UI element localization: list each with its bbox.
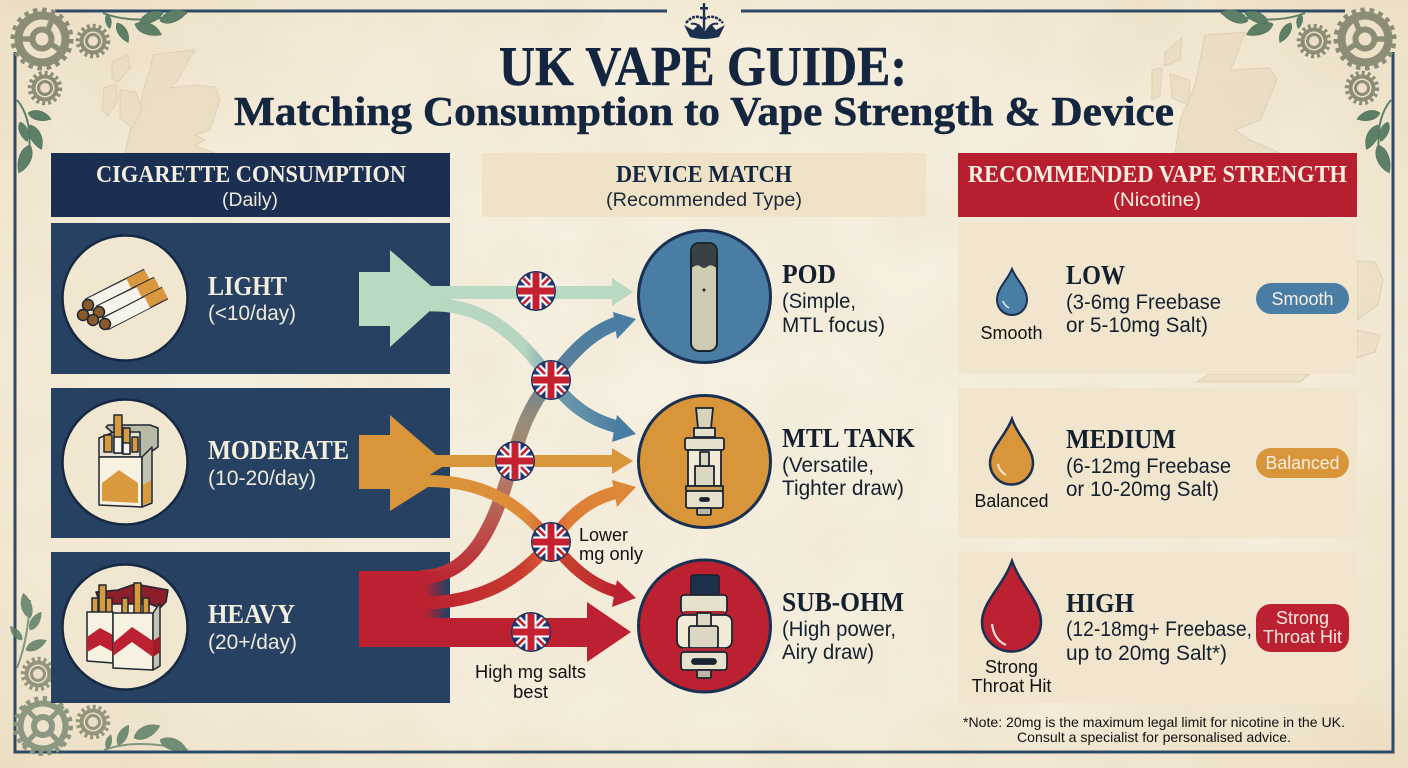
strength: medium: (6-12mg Freebase xyxy=(1066,455,1231,478)
strength: low: (3-6mg Freebase xyxy=(1066,291,1221,314)
background map: Scotland left xyxy=(102,50,220,153)
label: mtl tank: Tighter draw) xyxy=(782,477,904,500)
header: device match: DEVICE MATCH xyxy=(616,162,792,188)
gears bottom left xyxy=(16,659,108,753)
panel: low strength xyxy=(958,222,1357,374)
label: moderate xyxy=(208,435,349,490)
gears top right xyxy=(1299,10,1394,103)
label: strong throat hit: Throat Hit xyxy=(972,676,1052,696)
header: cigarette consumption xyxy=(51,153,450,217)
label: moderate: MODERATE xyxy=(208,435,349,465)
badge: strong throat hit: Strong xyxy=(1276,608,1329,628)
flag: moderate to mtl tank xyxy=(495,441,535,481)
header: cigarette consumption: (Daily) xyxy=(222,190,278,211)
badge: balanced: Balanced xyxy=(1266,453,1340,473)
device: mtl tank xyxy=(638,396,915,528)
strength: medium: MEDIUM xyxy=(1066,424,1176,454)
header: device match xyxy=(482,153,926,217)
panel: heavy smokers xyxy=(51,552,450,703)
strength: low: LOW xyxy=(1066,260,1125,290)
panel: high strength xyxy=(958,552,1357,703)
footnote: Consult a specialist for personalised advice. xyxy=(1017,729,1291,745)
background map: Scotland right xyxy=(1152,32,1280,153)
note: lower mg only xyxy=(579,525,643,564)
strength: high: up to 20mg Salt*) xyxy=(1066,642,1227,665)
label: pod: POD xyxy=(782,259,836,289)
icon: loose cigarettes xyxy=(78,275,165,330)
leaves bottom left xyxy=(7,592,189,755)
arrow: light to pod xyxy=(359,250,633,347)
header: recommended vape strength: (Nicotine) xyxy=(1113,190,1201,211)
label: balanced: Balanced xyxy=(974,491,1048,511)
header: recommended vape strength: RECOMMENDED VAPE STRENGTH xyxy=(968,162,1347,188)
badge: strong throat hit: Throat Hit xyxy=(1263,627,1342,647)
strength: low xyxy=(1066,260,1221,337)
icon: red drop xyxy=(982,561,1041,652)
background map: England fragment right xyxy=(1197,261,1383,382)
label: light xyxy=(208,271,296,325)
note: high mg salts best: best xyxy=(513,682,548,702)
label: moderate: (10-20/day) xyxy=(208,467,316,490)
icon: orange drop xyxy=(990,419,1033,484)
label: mtl tank: MTL TANK xyxy=(782,423,915,453)
badge: smooth xyxy=(1256,283,1349,314)
label: strong throat hit: Strong xyxy=(985,657,1038,677)
flag: upper crossing xyxy=(531,360,571,400)
label: smooth: Smooth xyxy=(980,323,1042,343)
arrow: moderate to mtl tank xyxy=(359,415,633,511)
label: sub-ohm: Airy draw) xyxy=(782,641,874,664)
icon: open cigarette pack xyxy=(99,415,158,507)
header: recommended vape strength xyxy=(958,153,1357,217)
leaves top right xyxy=(1219,6,1394,175)
arrow: moderate to sub-ohm xyxy=(425,481,636,607)
panel: moderate smokers xyxy=(51,388,450,538)
title: UK VAPE GUIDE: xyxy=(499,36,907,98)
strength: medium: or 10-20mg Salt) xyxy=(1066,478,1219,501)
header: cigarette consumption: CIGARETTE CONSUMPTION xyxy=(96,162,407,188)
label: heavy xyxy=(208,599,297,654)
label: strong throat hit xyxy=(972,657,1052,696)
device: sub-ohm xyxy=(638,560,904,692)
arrow: heavy to pod via crossing xyxy=(420,312,636,577)
note: lower mg only: Lower xyxy=(579,525,628,545)
strength: high: HIGH xyxy=(1066,588,1134,618)
note: high mg salts best: High mg salts xyxy=(475,662,586,682)
icon: sub-ohm tank xyxy=(677,575,732,678)
strength: medium xyxy=(1066,424,1231,501)
label: sub-ohm xyxy=(782,587,904,664)
panel: medium strength xyxy=(958,388,1357,538)
footnote xyxy=(963,714,1345,745)
header: device match: (Recommended Type) xyxy=(606,190,802,211)
label: sub-ohm: SUB-OHM xyxy=(782,587,904,617)
flag: light to pod xyxy=(516,271,556,311)
gears top left xyxy=(13,10,108,103)
device: pod xyxy=(638,230,885,362)
label: pod: (Simple, xyxy=(782,290,856,313)
label: mtl tank: (Versatile, xyxy=(782,454,874,477)
label: light: (<10/day) xyxy=(208,302,296,325)
icon: mtl tank xyxy=(685,408,724,515)
strength: high: (12-18mg+ Freebase, xyxy=(1066,618,1252,641)
label: light: LIGHT xyxy=(208,271,287,301)
icon: two cigarette packs xyxy=(87,583,168,670)
note: high mg salts best xyxy=(475,662,586,702)
leaves top left xyxy=(14,6,189,175)
arrow: heavy to sub-ohm xyxy=(359,571,631,662)
badge: smooth: Smooth xyxy=(1272,289,1334,309)
label: heavy: HEAVY xyxy=(208,599,295,629)
title xyxy=(234,36,1174,134)
label: mtl tank xyxy=(782,423,915,500)
label: pod: MTL focus) xyxy=(782,314,885,337)
strength: high xyxy=(1066,588,1252,665)
badge: balanced xyxy=(1256,448,1349,478)
title: Matching Consumption to Vape Strength & Device xyxy=(234,88,1174,134)
crown icon xyxy=(684,3,725,39)
label: heavy: (20+/day) xyxy=(208,631,297,654)
footnote: *Note: 20mg is the maximum legal limit for nicotine in the UK. xyxy=(963,714,1345,730)
panel: light smokers xyxy=(51,223,450,374)
arrow: light to mtl tank xyxy=(430,305,636,442)
icon: blue drop xyxy=(997,269,1027,315)
badge: strong throat hit xyxy=(1256,604,1349,652)
strength: low: or 5-10mg Salt) xyxy=(1066,314,1208,337)
note: lower mg only: mg only xyxy=(579,544,643,564)
flag: heavy to sub-ohm xyxy=(511,612,551,652)
label: sub-ohm: (High power, xyxy=(782,618,896,641)
flag: lower crossing xyxy=(531,522,571,562)
icon: pod vape xyxy=(691,243,717,351)
arrow: heavy to mtl tank xyxy=(420,480,636,603)
label: pod xyxy=(782,259,885,337)
